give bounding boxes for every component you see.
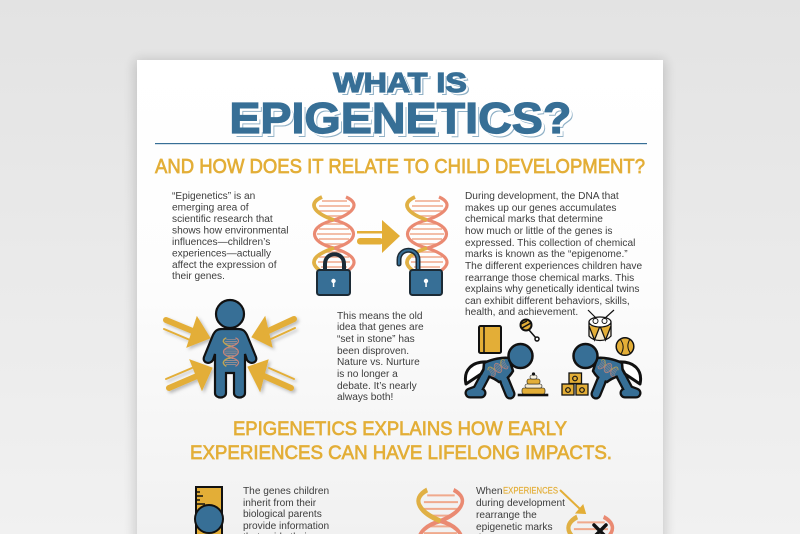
text: epigenetics intro: influences—children’s <box>172 237 270 248</box>
ball <box>616 338 634 355</box>
blocks <box>562 373 588 395</box>
text: set in stone: “set in stone” has <box>337 334 415 345</box>
rattle <box>520 320 539 341</box>
text: development and DNA: rearrange those chemical marks. This <box>465 273 634 284</box>
baby body <box>465 344 532 394</box>
text: epigenetics intro: affect the expression of <box>172 260 277 271</box>
word: experiences: EXPERIENCES <box>503 486 558 496</box>
text: epigenetics intro: experiences—actually <box>172 248 272 260</box>
text: set in stone: debate. It’s nearly <box>337 381 418 392</box>
icon: closed lock <box>317 254 350 295</box>
text: genes inherited: provide information <box>243 521 329 532</box>
icon: left DNA <box>314 197 354 272</box>
text: genes inherited: biological parents <box>243 509 322 520</box>
page <box>137 60 663 534</box>
icon: open lock <box>399 250 442 295</box>
text: development and DNA: chemical marks that determine <box>465 214 603 225</box>
DNA on chest <box>223 338 239 366</box>
text: epigenetics intro: “Epigenetics” is an <box>172 191 255 202</box>
text: when experiences: rearrange the <box>476 510 537 521</box>
text: development and DNA: The different experiences children have <box>465 261 642 272</box>
head <box>195 505 223 533</box>
text: development and DNA: can exhibit different behaviors, skills, <box>465 296 630 307</box>
text: development and DNA: expressed. This collection of chemical <box>465 238 635 249</box>
block letters <box>566 376 584 392</box>
X mark <box>594 525 606 534</box>
icon: arrow <box>357 220 400 253</box>
book <box>479 326 501 353</box>
icon: right DNA <box>407 197 447 272</box>
title rule <box>155 143 647 144</box>
text: set in stone: Nature vs. Nurture <box>337 357 420 368</box>
icon: height ruler with child <box>195 487 223 534</box>
text: when experiences: When <box>476 486 502 497</box>
stacking rings <box>518 373 548 396</box>
icon: person with arrows <box>164 300 295 398</box>
icon: baby with book and rattle <box>465 320 548 396</box>
icon: locked DNA to unlocked DNA <box>314 197 447 295</box>
text: set in stone: This means the old <box>337 311 423 322</box>
page shadow <box>135 60 665 534</box>
heading: lifelong impacts <box>190 419 612 464</box>
text: epigenetics intro: scientific research that <box>172 214 273 225</box>
text: set in stone: idea that genes are <box>337 322 424 333</box>
arrow: experiences to marks <box>560 490 586 514</box>
text: epigenetics intro: their genes. <box>172 271 225 282</box>
heading: lifelong impacts: EPIGENETICS EXPLAINS HOW EARLY <box>233 419 567 440</box>
text: when experiences: during development <box>476 498 565 509</box>
DNA <box>568 517 612 534</box>
title: epigenetics: EPIGENETICS? <box>229 94 571 143</box>
text: set in stone: been disproven. <box>337 346 409 357</box>
drum <box>588 310 614 340</box>
baby body <box>574 344 641 394</box>
head <box>216 300 244 328</box>
text: development and DNA: explains why genetically identical twins <box>465 284 639 295</box>
person figure <box>204 329 256 398</box>
text: when experiences <box>476 486 565 534</box>
icon: DNA with X mark <box>568 517 612 534</box>
text: development and DNA: During development, the DNA that <box>465 191 619 202</box>
text: development and DNA: makes up our genes accumulates <box>465 203 616 214</box>
icon: baby with drum, ball and blocks <box>562 310 641 395</box>
text: epigenetics intro: emerging area of <box>172 202 249 214</box>
subtitle: AND HOW DOES IT RELATE TO CHILD DEVELOPMENT? <box>155 156 645 178</box>
text: epigenetics intro: shows how environmental <box>172 226 288 236</box>
text: development and DNA: marks is known as the “epigenome.” <box>465 249 628 260</box>
ruler <box>196 487 222 534</box>
icon: DNA lower left <box>418 490 462 534</box>
text: development and DNA: health, and achievement. <box>465 307 578 318</box>
heading: lifelong impacts: EXPERIENCES CAN HAVE LIFELONG IMPACTS. <box>190 443 612 464</box>
text: genes inherited: inherit from their <box>243 498 317 509</box>
title: what is: WHAT IS <box>333 66 467 98</box>
text: when experiences: epigenetic marks <box>476 522 553 533</box>
arrows pointing inward <box>164 317 295 391</box>
text: genes inherited: The genes children <box>243 486 329 497</box>
text: set in stone: always both! <box>337 392 393 403</box>
text: development and DNA: how much or little of the genes is <box>465 226 612 237</box>
text: set in stone: is no longer a <box>337 369 398 380</box>
